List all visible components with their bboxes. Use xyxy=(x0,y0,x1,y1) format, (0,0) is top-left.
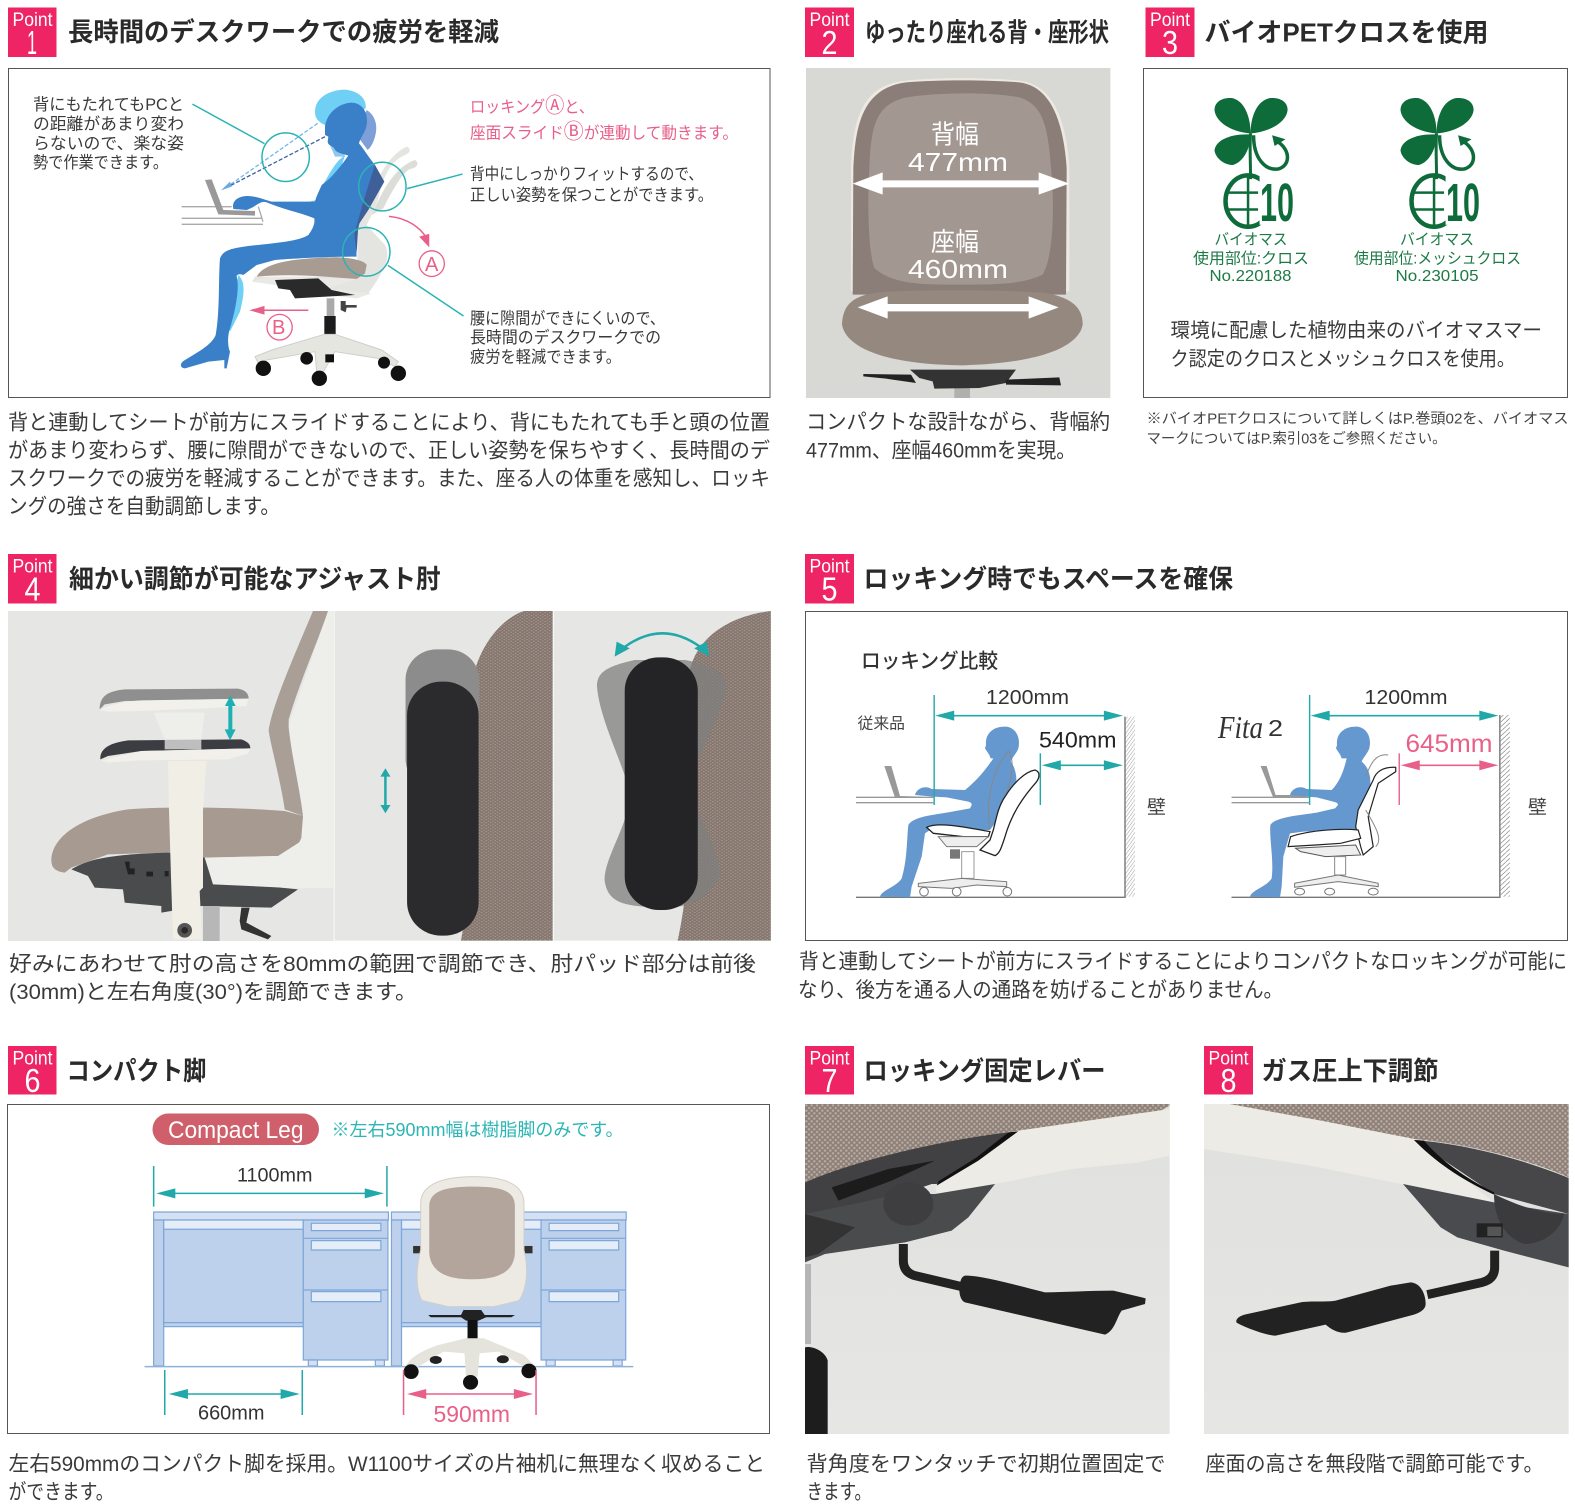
note: resin base only: ※左右590mm幅は樹脂脚のみです。 xyxy=(332,1120,624,1140)
label: biomass cloth: No.220188 xyxy=(1210,268,1292,285)
badge: Point 1: 1 xyxy=(27,24,37,61)
text: waist note xyxy=(470,309,665,366)
arrows A and B xyxy=(249,216,444,340)
badge: Point 6: 6 xyxy=(24,1062,40,1099)
panel: Point 1 xyxy=(8,8,770,518)
labels: back width: 477mm xyxy=(908,147,1008,177)
pill: Compact Leg: Compact Leg xyxy=(168,1117,304,1144)
badge: Point 5: 5 xyxy=(822,570,838,608)
body text: Point 1 xyxy=(8,412,770,518)
text: waist note: 腰に隙間ができにくいので、 xyxy=(470,309,665,328)
labels: back width xyxy=(908,120,1008,177)
panel: Point 3 xyxy=(1144,8,1568,448)
text: waist note: 疲労を軽減できます。 xyxy=(470,348,621,366)
heading: Point 7: ロッキング固定レバー xyxy=(864,1056,1106,1086)
body text: Point 6 xyxy=(8,1453,765,1504)
label: biomass cloth: 使用部位:クロス xyxy=(1193,250,1309,268)
dimension: 660mm xyxy=(165,1370,302,1424)
badge: Point 4: Point xyxy=(12,556,53,578)
illustration: chair rear view xyxy=(404,1177,537,1390)
badge: Point 4 xyxy=(8,554,56,608)
label: biomass mesh: 使用部位:メッシュクロス xyxy=(1354,250,1521,268)
label: biomass cloth: バイオマス xyxy=(1214,232,1288,248)
labels: seat width: 460mm xyxy=(908,254,1008,284)
labels: seat width xyxy=(908,227,1008,284)
badge: Point 7: Point xyxy=(810,1048,850,1070)
text: pink linked motion note xyxy=(470,94,738,144)
body text: Point 2: コンパクトな設計ながら、背幅約 xyxy=(806,411,1110,434)
label: A: A xyxy=(425,254,439,276)
footnote: Point 3: マークについてはP.索引03をご参照ください。 xyxy=(1146,430,1446,448)
icon: biomass mark cloth: 10 xyxy=(1260,173,1294,233)
footnote: Point 3 xyxy=(1146,410,1568,448)
badge: Point 7 xyxy=(805,1046,854,1099)
dimension: 590mm: 590mm xyxy=(434,1401,510,1427)
panel: Point 6 xyxy=(8,1046,770,1504)
body text: Point 2 xyxy=(806,411,1110,462)
body text: Point 1: ングの強さを自動調節します。 xyxy=(8,496,280,518)
body text: Point 6: 左右590mmのコンパクト脚を採用。W1100サイズの片袖机に無理なく収めること xyxy=(8,1453,765,1476)
panel: Point 2 xyxy=(805,8,1110,462)
body text: Point 6: ができます。 xyxy=(8,1481,114,1504)
label: biomass cloth xyxy=(1193,232,1309,285)
text: head position note: 背にもたれてもPCと xyxy=(33,95,184,114)
photo: armrest height side view xyxy=(8,611,334,941)
frame: biomass xyxy=(1144,68,1568,398)
body text: Point 8: 座面の高さを無段階で調節可能です。 xyxy=(1206,1453,1544,1476)
label: biomass mesh: バイオマス xyxy=(1400,232,1474,248)
labels: seat width: 座幅 xyxy=(931,227,979,257)
dimension: 590mm xyxy=(404,1370,536,1427)
icon: biomass mark cloth xyxy=(1215,98,1294,233)
body text: Point 7 xyxy=(806,1453,1166,1504)
heading: Point 1: 長時間のデスクワークでの疲労を軽減 xyxy=(68,17,499,47)
arrow: back width xyxy=(853,172,1069,195)
label: wall left: 壁 xyxy=(1147,796,1166,818)
icon: biomass mark mesh xyxy=(1401,98,1480,233)
text: back fit note xyxy=(470,164,713,204)
label: 540mm: 540mm xyxy=(1039,728,1116,752)
badge: Point 1 xyxy=(8,8,56,61)
badge: Point 8: Point xyxy=(1208,1048,1249,1070)
body text: Point 1: があまり変わらず、腰に隙間ができないので、正しい姿勢を保ちやすく、長時間のデ xyxy=(8,440,770,462)
frame: compact leg xyxy=(8,1104,770,1434)
panel: Point 4 xyxy=(8,554,771,1004)
illustration: seated person on chair xyxy=(181,90,417,386)
text: back fit note: 正しい姿勢を保つことができます。 xyxy=(470,186,713,204)
text: waist note: 長時間のデスクワークでの xyxy=(470,327,661,347)
badge: Point 3: Point xyxy=(1150,10,1191,31)
label: conventional product: 従来品 xyxy=(858,714,905,732)
dimension: 660mm: 660mm xyxy=(198,1402,264,1424)
text: head position note: の距離があまり変わ xyxy=(33,114,184,134)
text: biomass description: ク認定のクロスとメッシュクロスを使用。 xyxy=(1170,348,1515,370)
callout circles and leader lines xyxy=(192,104,463,316)
diagram: Fita2 xyxy=(1232,715,1510,897)
badge: Point 2: Point xyxy=(810,10,850,31)
dimension: 1100mm xyxy=(154,1166,387,1207)
panel: Point 5 xyxy=(798,554,1568,1002)
body text: Point 2: 477mm、座幅460mmを実現。 xyxy=(806,440,1076,462)
label: biomass mesh: No.230105 xyxy=(1396,268,1478,285)
badge: Point 8: 8 xyxy=(1220,1062,1236,1099)
diagram frame: sitting posture xyxy=(8,68,770,398)
body text: Point 4: (30mm)と左右角度(30°)を調節できます。 xyxy=(9,981,417,1004)
body text: Point 4 xyxy=(9,953,756,1004)
badge: Point 1: Point xyxy=(12,10,53,31)
text: head position note xyxy=(33,95,184,172)
labels: back width: 背幅 xyxy=(931,120,979,150)
text: pink linked motion note: 座面スライドⒷが連動して動きます。 xyxy=(470,120,738,144)
label: biomass mesh xyxy=(1354,232,1521,285)
photo: gas lift lever xyxy=(1204,1104,1569,1434)
badge: Point 5 xyxy=(805,554,854,608)
text: biomass description: 環境に配慮した植物由来のバイオマスマー xyxy=(1170,319,1542,342)
logo: Fita 2: 2 xyxy=(1268,715,1283,741)
text: head position note: 勢で作業できます。 xyxy=(33,153,168,172)
label: 645mm: 645mm xyxy=(1406,730,1492,758)
badge: Point 3: 3 xyxy=(1162,24,1178,61)
label: wall right: 壁 xyxy=(1528,796,1547,818)
photo: armrest front-back adjustment xyxy=(335,611,553,941)
dimension: 1100mm: 1100mm xyxy=(237,1166,312,1186)
photo: chair front with widths xyxy=(806,68,1110,398)
text: back fit note: 背中にしっかりフィットするので、 xyxy=(470,164,703,184)
badge: Point 7: 7 xyxy=(822,1062,838,1099)
panel: Point 8 xyxy=(1204,1046,1569,1476)
icon: biomass mark mesh: 10 xyxy=(1446,173,1480,233)
badge: Point 2: 2 xyxy=(822,24,838,61)
diagram: conventional product xyxy=(856,717,1135,897)
heading: Point 5: ロッキング時でもスペースを確保 xyxy=(864,564,1233,594)
body text: Point 7: 背角度をワンタッチで初期位置固定で xyxy=(806,1453,1166,1476)
heading: Point 2: ゆったり座れる背・座形状 xyxy=(865,18,1109,48)
badge: Point 4: 4 xyxy=(24,570,40,608)
badge: Point 5: Point xyxy=(810,556,850,578)
text: head position note: らないので、楽な姿 xyxy=(33,134,184,153)
label: 1200mm right: 1200mm xyxy=(1364,687,1448,709)
badge: Point 2 xyxy=(805,8,854,61)
frame: rocking comparison xyxy=(806,612,1568,940)
heading: Point 6: コンパクト脚 xyxy=(66,1056,206,1086)
badge: Point 6: Point xyxy=(12,1048,53,1070)
badge: Point 3 xyxy=(1146,8,1194,61)
label: 1200mm left: 1200mm xyxy=(986,687,1069,709)
photo: armrest angle adjustment xyxy=(554,611,771,941)
subheading: rocking comparison: ロッキング比較 xyxy=(861,650,998,673)
heading: Point 3: バイオPETクロスを使用 xyxy=(1204,18,1488,48)
label: B: B xyxy=(272,317,285,339)
footnote: Point 3: ※バイオPETクロスについて詳しくはP.巻頭02を、バイオマス xyxy=(1146,410,1568,428)
dimension arrows: Fita2 xyxy=(1310,695,1498,805)
panel: Point 7 xyxy=(805,1046,1170,1504)
body text: Point 1: 背と連動してシートが前方にスライドすることにより、背にもたれても手と頭の位置 xyxy=(8,412,770,434)
body text: Point 4: 好みにあわせて肘の高さを80mmの範囲で調節でき、肘パッド部分は前後 xyxy=(9,953,756,976)
badge: Point 6 xyxy=(8,1046,56,1099)
text: biomass description xyxy=(1170,319,1542,370)
arrow: seat width xyxy=(858,296,1059,319)
heading: Point 8: ガス圧上下調節 xyxy=(1262,1056,1438,1086)
badge: Point 8 xyxy=(1204,1046,1253,1099)
dimension arrows: conventional xyxy=(934,695,1123,805)
heading: Point 4: 細かい調節が可能なアジャスト肘 xyxy=(69,564,441,594)
body text: Point 7: きます。 xyxy=(806,1481,871,1504)
photo: rocking lock lever xyxy=(805,1104,1170,1434)
body text: Point 5: なり、後方を通る人の通路を妨げることがありません。 xyxy=(798,979,1283,1002)
body text: Point 1: スクワークでの疲労を軽減することができます。また、座る人の体重を感知し、ロッキ xyxy=(8,468,770,490)
logo: Fita 2: Fita xyxy=(1217,709,1263,745)
body text: Point 5 xyxy=(798,950,1567,1002)
text: pink linked motion note: ロッキングⒶと、 xyxy=(470,94,594,118)
illustration: two desks xyxy=(145,1212,633,1367)
